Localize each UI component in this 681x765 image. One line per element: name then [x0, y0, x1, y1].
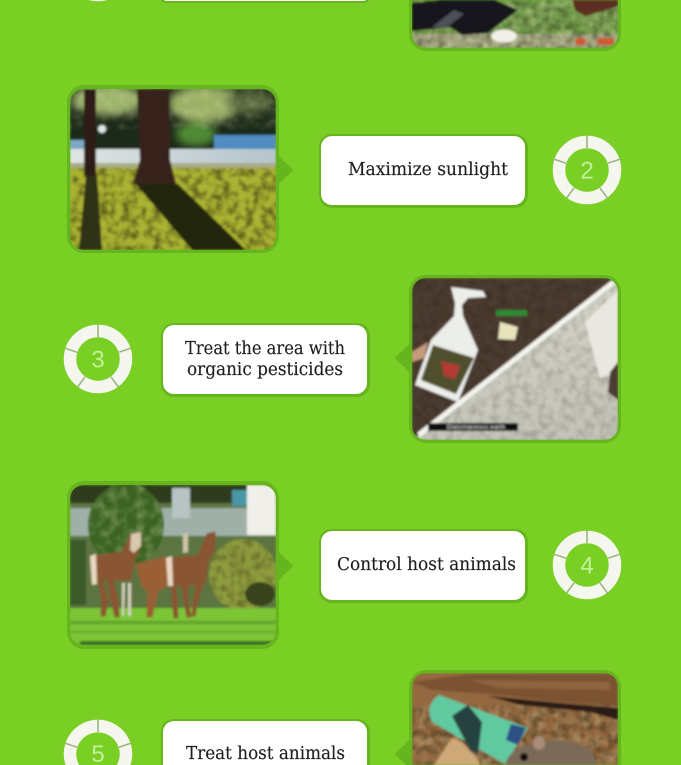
arrow: photo to Maximize sunlight	[279, 156, 293, 184]
step 3: number ring	[65, 324, 131, 387]
step 2: photo of trees in sunlight	[67, 85, 279, 253]
step 2: number ring: 2	[580, 158, 594, 184]
step 3: label box	[161, 323, 370, 397]
step 3: photo of pesticide bottle and diatomaceous earth	[409, 275, 621, 443]
arrow: photo to Treat host animals	[395, 740, 409, 765]
step 5: number ring, cropped at bottom	[64, 720, 132, 765]
step 3: number ring: 3	[91, 346, 105, 374]
step 2: label text: Maximize sunlight	[348, 160, 508, 180]
step 2: label box	[319, 134, 528, 208]
step 1: number ring, cropped at top	[89, 0, 107, 1]
step 4: photo of deer on a lawn	[67, 481, 279, 649]
step 1: label box, cropped at top	[161, 0, 369, 3]
step 5: label box, cropped at bottom	[161, 719, 370, 765]
deer group	[90, 532, 215, 618]
step 3: photo of pesticide bottle and diatomaceous earth: Diatomaceous earth	[447, 424, 505, 431]
step 4: label text: Control host animals	[337, 555, 516, 575]
step 5: photo of mouse with tick tube	[409, 670, 621, 765]
step 4: number ring	[554, 530, 620, 593]
step 4: label box	[319, 529, 528, 603]
step 5: label text: Treat host animals	[186, 744, 345, 764]
step 1: photo of trash bags on grass	[409, 0, 621, 51]
step 3: label text: organic pesticides	[187, 360, 343, 380]
step 2: number ring	[554, 136, 620, 198]
arrow: photo to Control host animals	[279, 552, 293, 580]
step 3: label text: Treat the area with	[185, 339, 345, 359]
arrow: photo to Treat the area	[395, 344, 409, 372]
step 4: number ring: 4	[580, 552, 594, 580]
step 3: label text	[185, 339, 345, 380]
